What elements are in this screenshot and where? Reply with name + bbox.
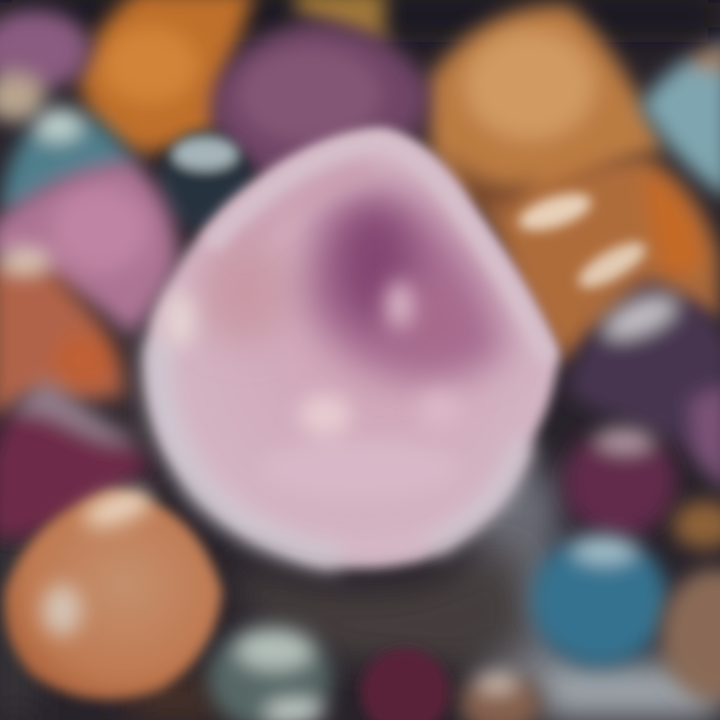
stone: orange top left xyxy=(78,0,385,155)
stone: plum round right xyxy=(564,428,676,536)
stone: dark purple right xyxy=(565,280,720,495)
quartz inner cavity xyxy=(200,189,505,382)
stone: teal upper left xyxy=(0,105,135,215)
stone: amber top right xyxy=(425,5,665,225)
stone: tan right edge xyxy=(661,501,720,701)
stone: dark shadow below quartz xyxy=(235,545,530,670)
stone: blue round bottom right xyxy=(532,534,668,666)
stone: coral left xyxy=(0,247,125,420)
stone: dark blue round xyxy=(159,130,251,230)
stone: orange agate bottom left xyxy=(4,482,222,700)
quartz lower-left frosted edge xyxy=(157,340,525,560)
stone: burgundy left xyxy=(0,380,150,540)
stone: pink left xyxy=(0,160,178,335)
quartz rim highlight xyxy=(215,142,545,352)
stone: amber banded right xyxy=(490,155,720,365)
stone: burgundy small bottom xyxy=(361,648,449,720)
quartz rim inner shade xyxy=(240,172,370,250)
stone: clear sphere bottom xyxy=(208,624,332,720)
highlights on banded amber xyxy=(514,186,652,296)
stone: purple top centre xyxy=(212,22,430,185)
central stone: pink quartz xyxy=(147,128,560,569)
stone: tan small bottom xyxy=(460,672,540,720)
stone: mauve top left corner xyxy=(0,10,90,122)
quartz inner glints xyxy=(166,281,462,500)
stone: pale blue top right xyxy=(640,40,720,200)
